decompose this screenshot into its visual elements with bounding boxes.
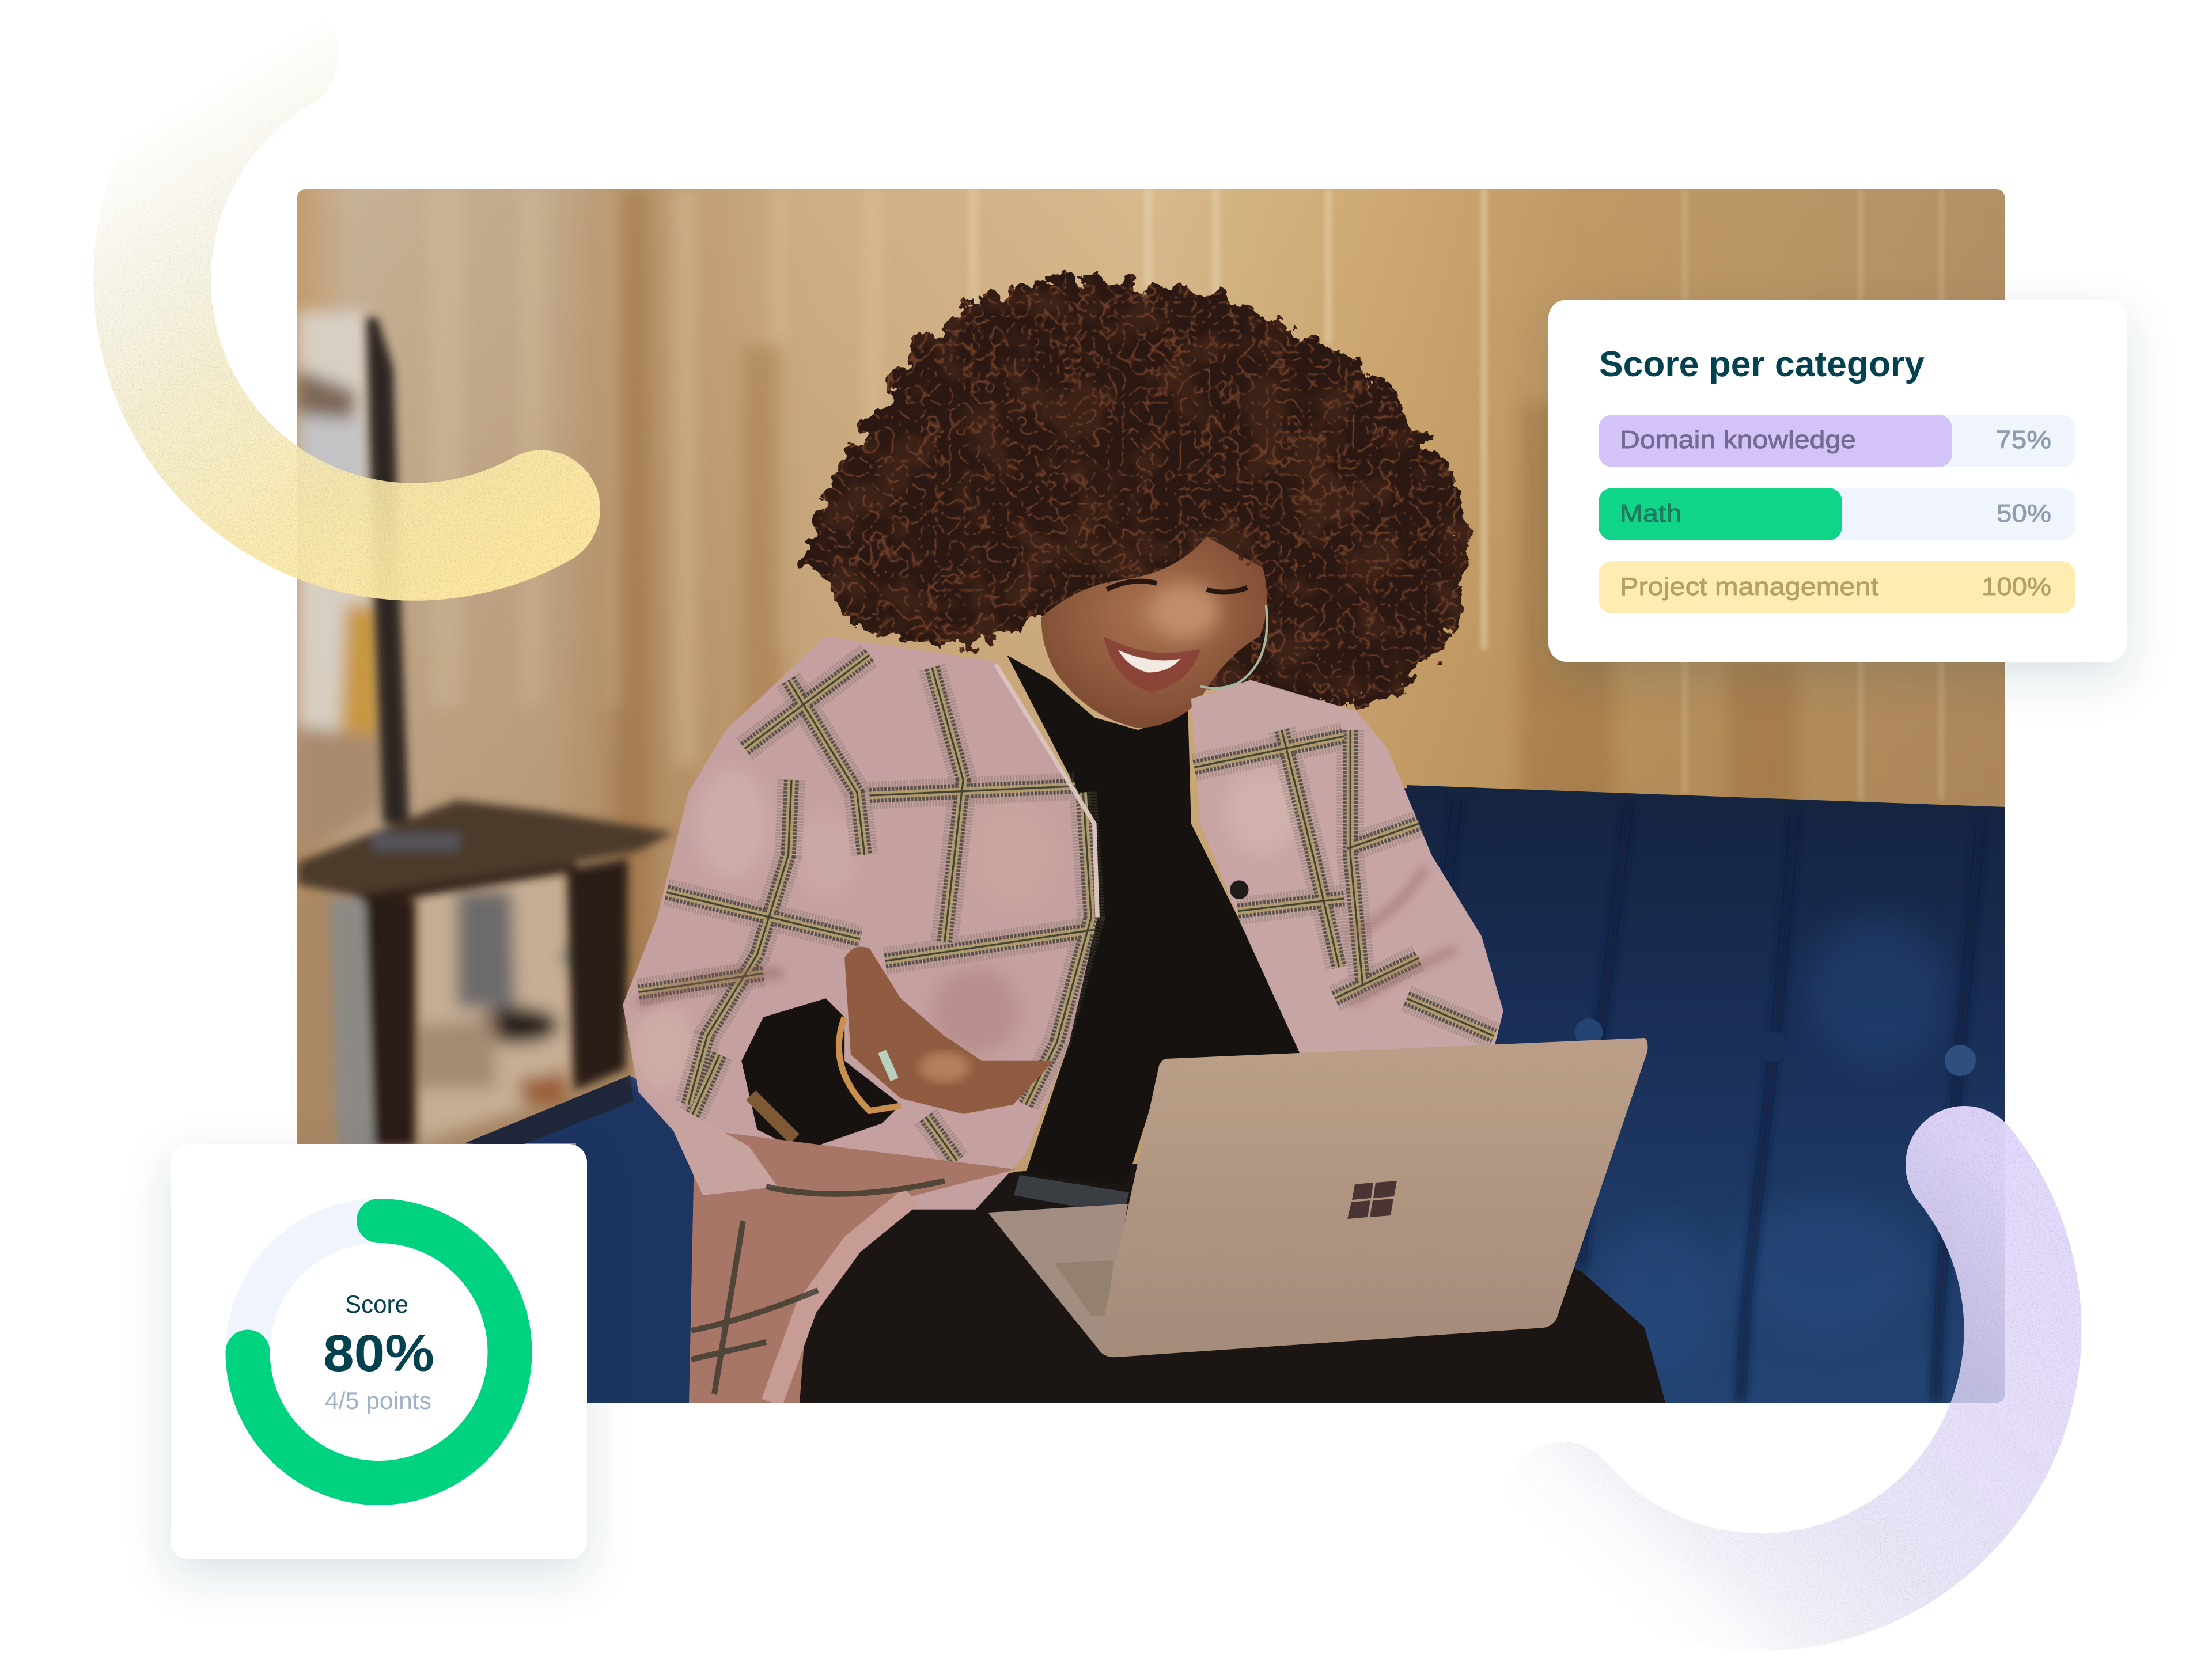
bar: project management 100%: 100%	[1982, 573, 2051, 601]
jacket shading	[632, 767, 1300, 1092]
hoop earring	[1200, 605, 1267, 688]
woman: jacket, top, face and hand	[623, 536, 1503, 1210]
jacket folds	[638, 867, 1456, 1005]
purple gradient arc	[1562, 1165, 2023, 1592]
lower jacket	[657, 1094, 1129, 1403]
lapel edge	[995, 664, 1097, 917]
points: 4/5 points	[325, 1387, 431, 1414]
panel: overall score	[171, 1144, 587, 1559]
score value: 80%	[323, 1325, 434, 1382]
left jacket panel	[623, 637, 1097, 1210]
laptop	[988, 1038, 1647, 1357]
score label: Score	[345, 1291, 408, 1319]
bracelets	[839, 1017, 901, 1111]
donut chart: 80%	[248, 1221, 510, 1483]
hand	[844, 947, 1054, 1114]
bar: project management 100%: Project management	[1620, 573, 1878, 601]
windows logo	[1347, 1181, 1397, 1219]
face	[1041, 536, 1267, 728]
bar: domain knowledge 75%: 75%	[1996, 426, 2051, 454]
bar: math 50%: Math	[1620, 499, 1681, 528]
bar: domain knowledge 75%	[1599, 415, 2075, 467]
wood wall	[297, 189, 2005, 1403]
photo: woman with laptop on a sofa	[297, 189, 2005, 1403]
hair fringe over forehead	[1031, 461, 1290, 599]
heading: Score per category	[1599, 344, 1925, 384]
yellow gradient arc	[152, 55, 541, 542]
shirt cuff	[741, 998, 901, 1151]
bar: math 50%	[1599, 488, 2075, 540]
hair	[807, 277, 1469, 711]
dark trousers	[800, 1152, 1665, 1403]
bar: project management 100%	[1599, 561, 2075, 613]
plaid pattern	[638, 655, 1494, 1186]
jacket button	[1230, 880, 1248, 899]
cuff label	[751, 1095, 794, 1139]
bar: math 50%: 50%	[1997, 499, 2051, 528]
right jacket panel	[1191, 680, 1503, 1055]
blue sofa	[464, 787, 2005, 1403]
panel: score per category	[1548, 300, 2127, 662]
bar: domain knowledge 75%: Domain knowledge	[1620, 426, 1856, 454]
side table and lamp	[297, 311, 674, 1146]
black top	[1007, 655, 1306, 1186]
ring	[882, 1051, 895, 1079]
